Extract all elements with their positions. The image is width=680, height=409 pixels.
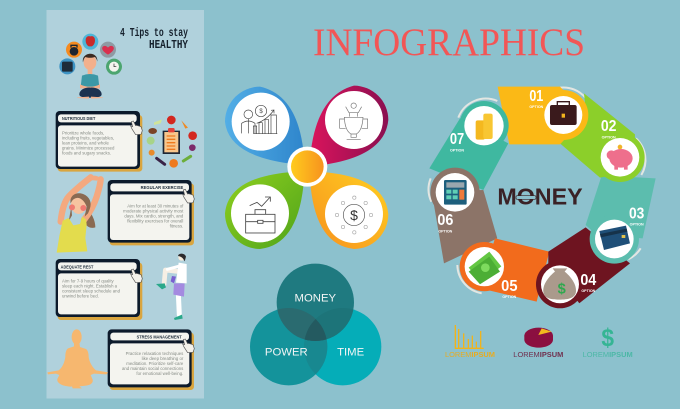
legend: gold bar icon: LOREMIPSUM xyxy=(445,352,495,359)
card: adequate rest: Aim for 7-9 hours of quality xyxy=(62,279,115,284)
heading: 4 tips to stay healthy: 4 Tips to stay xyxy=(120,27,188,40)
step 03: credit card xyxy=(590,205,645,264)
card: nutritious diet: Prioritize whole foods, xyxy=(62,130,104,135)
illustration: man stretching leg xyxy=(156,254,187,320)
step 02: piggy bank xyxy=(595,118,645,182)
label: MONEY: MONEY xyxy=(295,293,337,305)
card: stress management: STRESS MANAGEMENT xyxy=(137,334,182,339)
card: regular exercise: REGULAR EXERCISE xyxy=(141,185,183,190)
step 02: piggy bank: 02 xyxy=(601,118,617,135)
card: nutritious diet: including fruits, vegetables, xyxy=(62,135,114,140)
label: TIME: TIME xyxy=(337,346,365,358)
card: stress management: Practice relaxation techniques xyxy=(126,351,183,356)
step 06: calculator: OPTION xyxy=(438,229,453,233)
petal: blue growth: $ xyxy=(259,109,263,115)
legend: green dollar icon: LOREMIPSUM xyxy=(583,352,633,359)
legend: green dollar icon xyxy=(583,325,633,359)
illustration: person with health icons xyxy=(59,34,122,98)
chart: four petal diagram xyxy=(225,86,388,249)
card: adequate rest: consistent sleep schedule and xyxy=(62,289,121,294)
card: regular exercise: days. Mix cardio, strength, and xyxy=(124,214,184,219)
step 04: money bag: OPTION xyxy=(581,289,596,293)
card: stress management: and maintain social connections xyxy=(122,366,183,371)
card: adequate rest xyxy=(56,259,142,320)
step 02: piggy bank: OPTION xyxy=(602,135,616,139)
step 06: calculator xyxy=(430,168,480,233)
petal: yellow dollar xyxy=(311,172,388,249)
step 04: money bag xyxy=(536,260,597,308)
illustration: woman stretching xyxy=(57,176,101,253)
step 01: briefcase: 01 xyxy=(529,88,544,105)
label: POWER: POWER xyxy=(265,346,308,358)
step 05: banknotes: OPTION xyxy=(502,295,517,299)
step 07: coins: OPTION xyxy=(450,149,464,153)
label: MONEY: MONEY xyxy=(497,183,583,209)
heading: 4 tips to stay healthy xyxy=(120,27,188,52)
card: adequate rest: sleep each night. Establish a xyxy=(62,284,118,289)
step 04: money bag: 04 xyxy=(580,272,597,289)
petal: yellow dollar: $ xyxy=(350,207,358,223)
heading: 4 tips to stay healthy: HEALTHY xyxy=(149,39,188,52)
petal: green briefcase xyxy=(225,172,303,249)
legend: gold bar icon xyxy=(445,325,495,359)
step 03: credit card: OPTION xyxy=(630,222,644,226)
card: nutritious diet: lean proteins, and whole xyxy=(62,140,110,145)
card: regular exercise: flexibility exercises for overall xyxy=(127,219,183,224)
card: stress management: like deep breathing or xyxy=(142,356,184,361)
step 06: calculator: 06 xyxy=(437,212,454,229)
petal: crimson trophy xyxy=(311,86,388,164)
card: stress management: meditation. Prioritize self-care xyxy=(126,361,184,366)
card: regular exercise: Aim for at least 30 minutes of xyxy=(127,204,184,209)
card: nutritious diet: grains. Minimize processed xyxy=(62,145,115,150)
title: INFOGRAPHICS: INFOGRAPHICS xyxy=(313,21,585,64)
step 05: banknotes xyxy=(460,242,518,299)
panel: 4 tips to stay healthy xyxy=(46,10,204,398)
centre circle xyxy=(287,147,327,187)
legend: lorem ipsum icons xyxy=(445,325,633,359)
illustration: meditation silhouette xyxy=(47,329,108,388)
step 07: coins: 07 xyxy=(450,131,464,148)
step 04: money bag: $ xyxy=(558,282,566,298)
step 03: credit card: 03 xyxy=(629,205,645,222)
step 05: banknotes: 05 xyxy=(501,278,518,295)
card: regular exercise: moderate physical activity most xyxy=(123,209,184,214)
card: regular exercise xyxy=(108,180,194,245)
card: regular exercise: fitness. xyxy=(170,224,183,229)
step 01: briefcase xyxy=(529,88,588,140)
legend: maroon pie icon: LOREMIPSUM xyxy=(513,352,564,359)
card: adequate rest: unwind before bed. xyxy=(62,294,99,299)
card: nutritious diet xyxy=(56,111,142,172)
card: nutritious diet: NUTRITIOUS DIET xyxy=(62,116,95,121)
card: stress management: for emotional well-being. xyxy=(136,371,183,376)
step 01: briefcase: OPTION xyxy=(529,105,544,109)
legend: maroon pie icon xyxy=(513,328,564,359)
card: adequate rest: ADEQUATE REST xyxy=(61,264,93,269)
step 07: coins xyxy=(450,101,509,153)
card: nutritious diet: foods and sugary snacks. xyxy=(62,150,111,155)
card: stress management xyxy=(108,329,194,390)
legend: green dollar icon: $ xyxy=(601,325,614,352)
chart: seven step money ring xyxy=(429,87,656,308)
petal: blue growth xyxy=(225,87,303,163)
chart: money power time venn diagram xyxy=(250,264,381,385)
illustration: healthy food around clipboard xyxy=(147,116,197,168)
